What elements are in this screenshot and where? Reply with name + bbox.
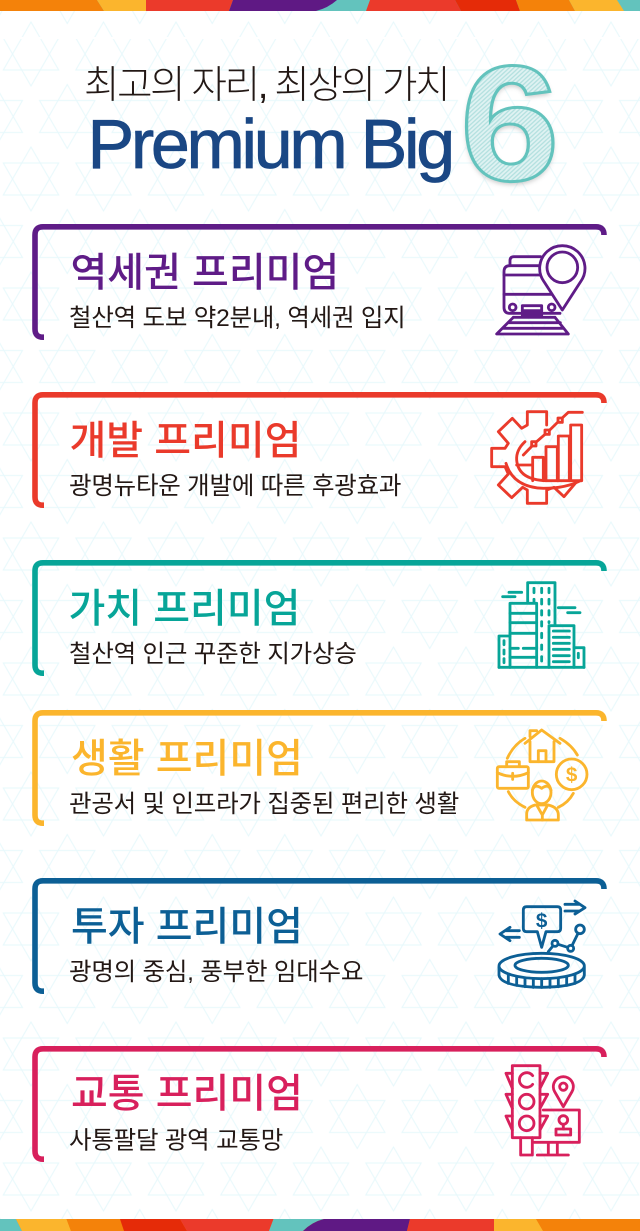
panel: development premium [35,395,604,505]
heading: 개발 프리미엄 [70,419,301,463]
top colour band [0,0,640,11]
heading: 교통 프리미엄 [71,1072,303,1116]
heading: 생활 프리미엄 [71,737,303,781]
icon: house, briefcase, money and person [497,730,587,820]
description: 철산역 인근 꾸준한 지가상승 [69,640,357,668]
icon: gear with bar chart [492,412,582,503]
big numeral 6: 6 [460,33,559,215]
heading: 투자 프리미엄 [71,905,303,949]
icon: traffic light and map pin [506,1066,579,1155]
title: Korean subtitle: 최고의 자리, 최상의 가치 [84,64,448,107]
panel: living premium [35,713,604,823]
big numeral 6: 6 [460,36,559,218]
description: 사통팔달 광역 교통망 [69,1126,283,1154]
icon: house, briefcase, money and person: $ [566,764,578,787]
panel: station premium [35,227,604,337]
description: 광명의 중심, 풍부한 임대수요 [69,958,363,986]
icon: coin with dollar bubble [499,901,585,987]
description: 관공서 및 인프라가 집중된 편리한 생활 [69,790,459,818]
panel: transport premium [35,1049,604,1159]
panel: investment premium [35,881,604,991]
icon: coin with dollar bubble: $ [536,909,548,932]
title: Premium Big: Premium Big [88,105,452,183]
heading: 역세권 프리미엄 [70,251,339,295]
bottom colour band [0,1219,640,1231]
description: 광명뉴타운 개발에 따른 후광효과 [69,472,401,500]
heading: 가치 프리미엄 [68,587,300,631]
icon: train with map pin [497,246,585,334]
description: 철산역 도보 약2분내, 역세권 입지 [69,304,406,332]
icon: city buildings [499,583,584,667]
panel: value premium [35,563,604,673]
